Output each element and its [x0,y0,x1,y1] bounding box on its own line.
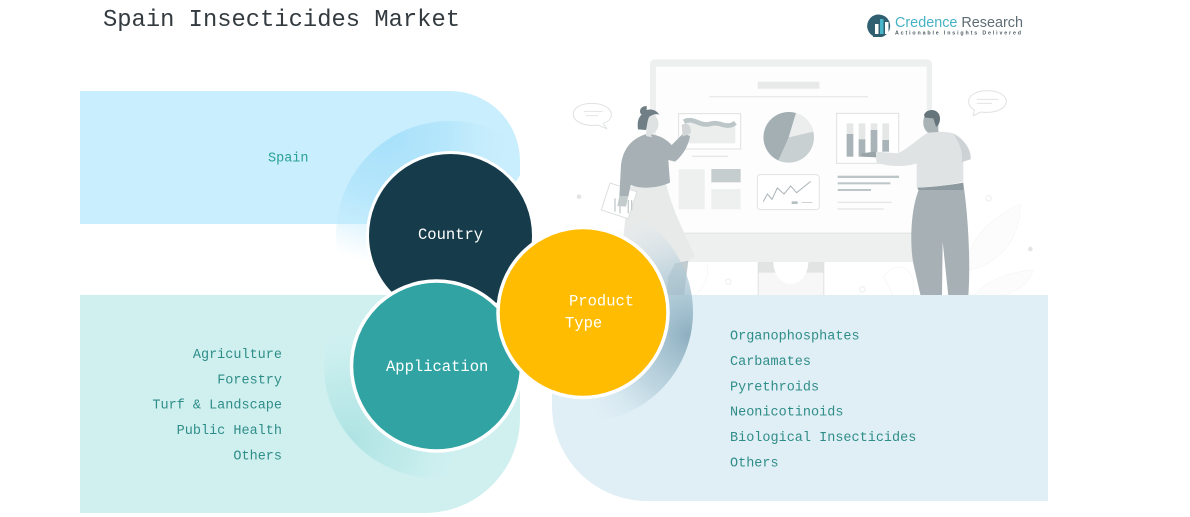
screen line chart [757,175,819,210]
title: Spain Insecticides Market [103,7,460,34]
label: Product Type: Type [565,314,602,332]
screen tiles [679,169,741,209]
screen bar chart [837,113,899,163]
illustration: presenters at monitor [573,59,1033,296]
swoosh: application [324,254,548,478]
list: product type items: Biological Insecticides [730,431,916,446]
icon: logo mark [867,14,890,37]
list: product type items: Carbamates [730,355,811,370]
list: product type items [730,330,916,472]
screen header [709,82,868,97]
panel: application [80,295,520,513]
logo tagline: Actionable Insights Delivered [895,30,1023,36]
logo wordmark: Credence Research [895,15,1023,31]
list: application items [152,348,282,464]
label: Application: Application [386,358,488,376]
circle: country [368,152,534,318]
figure: man [862,110,971,296]
list: application items: Others [233,450,282,464]
label: Product Type: Product [569,292,634,310]
swoosh: product type [473,202,693,422]
logo: Credence Research [867,14,1023,37]
speech bubble right [969,91,1006,116]
list: application items: Forestry [217,374,282,388]
screen area chart [679,114,741,157]
screen pie chart [763,112,814,163]
list: product type items: Organophosphates [730,330,860,344]
panel: country [80,91,520,224]
panel: product type [552,295,1048,501]
list: product type items: Neonicotinoids [730,406,843,420]
circle: application [352,281,522,451]
monitor [650,59,932,296]
text: Spain: Spain [268,152,309,166]
list: application items: Public Health [177,424,282,439]
circle: product type [498,228,668,398]
list: product type items: Others [730,456,779,472]
leaves background [693,204,1033,296]
swoosh: country [336,121,564,349]
label: Country: Country [418,226,483,244]
label: Product Type [565,292,634,332]
list: application items: Turf & Landscape [152,398,282,414]
list: product type items: Pyrethroids [730,380,819,396]
figure: woman [601,106,695,296]
screen text lines [838,176,899,210]
list: application items: Agriculture [193,348,282,363]
decorative dots [577,194,1033,292]
speech bubble left [573,103,611,129]
